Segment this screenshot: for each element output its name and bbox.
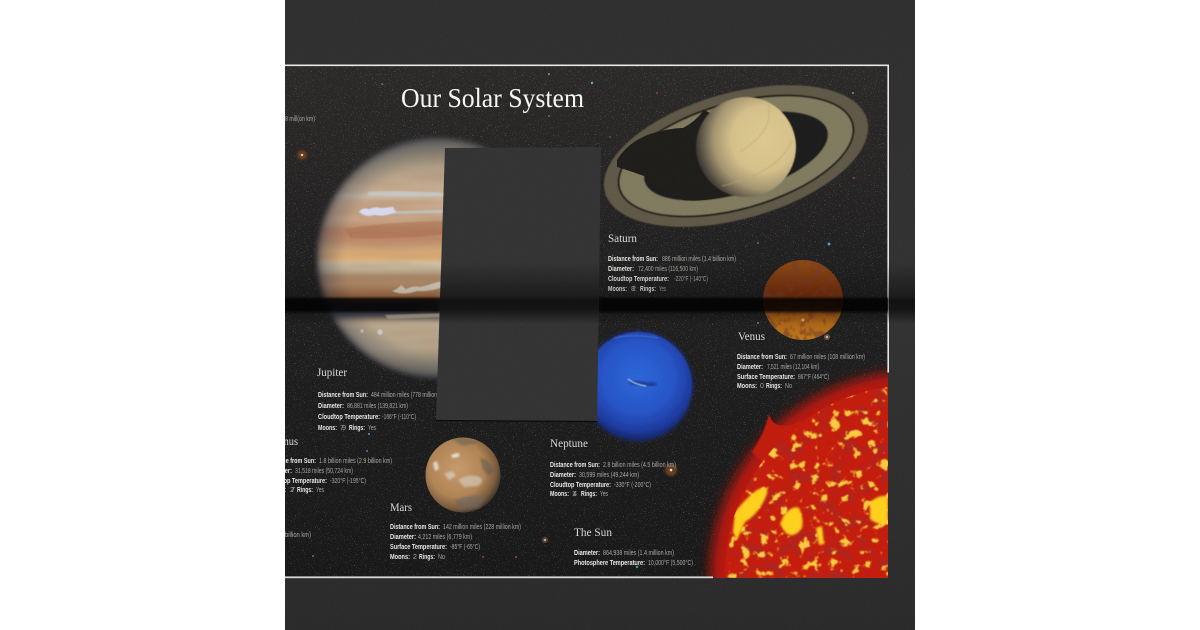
Sun prominence <box>752 414 801 460</box>
text block: Uranus: Rings: <box>297 487 313 494</box>
text block: Mars: 4,212 miles (6,779 km) <box>418 534 472 541</box>
text block: Venus: 7,521 miles (12,104 km) <box>767 364 819 371</box>
text block: Jupiter: Rings: <box>349 425 365 432</box>
text block: Neptune: Distance from Sun: <box>550 462 600 469</box>
Jupiter cloud details <box>345 191 445 335</box>
text block: Saturn: Diameter: <box>608 266 634 273</box>
text block: Venus: Moons: <box>737 383 757 390</box>
text block: Neptune: Moons: <box>550 491 569 498</box>
text block: Uranus <box>285 440 392 494</box>
text block: Venus <box>737 329 865 390</box>
horizontal fold shadow on margins <box>888 262 915 324</box>
Saturn globe <box>696 97 796 197</box>
text block: The Sun: Photosphere Temperature: <box>574 560 645 567</box>
text block: The Sun: Diameter: <box>574 550 600 557</box>
text block: Venus: Rings: <box>766 383 782 390</box>
text block: Neptune <box>550 436 676 498</box>
text block: Uranus: Moons: <box>266 487 286 494</box>
text block: Mars: Distance from Sun: <box>390 524 440 531</box>
text block: Venus: Diameter: <box>737 364 763 371</box>
text block: Mars: Rings: <box>419 554 435 561</box>
text block: Neptune: Neptune <box>550 436 588 450</box>
text block: Saturn: Rings: <box>640 286 656 293</box>
text block: Neptune: Cloudtop Temperature: <box>550 482 611 489</box>
text block: Mars: 142 million miles (228 million km) <box>443 524 521 531</box>
text block: Jupiter: 86,881 miles (139,821 km) <box>347 403 408 410</box>
text block: Venus: Surface Temperature: <box>737 374 795 381</box>
text block: Mars <box>390 500 521 561</box>
dark paper background <box>285 0 915 630</box>
text block: clipped distance fragments: 8 mill(on km) <box>285 116 315 123</box>
text block: Mars: -85°F (-65°C) <box>450 543 480 551</box>
planet: Venus <box>763 260 843 340</box>
text block: Uranus: Yes <box>316 487 324 494</box>
planet: Saturn <box>604 84 868 228</box>
text block: Saturn: 82 <box>631 286 636 293</box>
text block: Venus: Venus <box>738 329 765 343</box>
text block: Neptune: Rings: <box>581 491 597 498</box>
text block: Mars: Moons: <box>390 554 410 561</box>
text block: Saturn: 886 million miles (1.4 billion km) <box>662 256 736 263</box>
poster background <box>285 65 888 578</box>
text block: Uranus: 31,518 miles (50,724 km) <box>295 468 353 475</box>
star field <box>285 65 888 578</box>
text block: Jupiter <box>317 368 437 432</box>
text block: Uranus: Cloudtop Temperature: <box>266 478 327 485</box>
planet: Jupiter <box>314 136 488 380</box>
text block: Mars: No <box>438 554 445 561</box>
text block: Neptune: Yes <box>600 491 608 498</box>
text block: Saturn: -220°F (-140°C) <box>674 275 708 283</box>
title: Our Solar System <box>401 83 584 113</box>
text block: Mars: Diameter: <box>390 534 416 541</box>
text block: The Sun: The Sun <box>574 525 612 539</box>
text block: Venus: 0 <box>760 383 764 390</box>
text block: Neptune: 30,599 miles (49,244 km) <box>579 472 639 479</box>
text block: clipped distance fragments <box>285 116 315 539</box>
text block: Venus: 867°F (464°C) <box>798 373 829 381</box>
text block: The Sun: 864,938 miles (1.4 million km) <box>603 550 674 557</box>
text block: Uranus: Distance from Sun: <box>266 458 316 465</box>
text block: Jupiter: Diameter: <box>318 403 344 410</box>
text block: Jupiter: Cloudtop Temperature: <box>318 414 380 421</box>
text block: Saturn: Distance from Sun: <box>608 256 658 263</box>
text block: Saturn: Saturn <box>608 231 637 245</box>
text block: Venus: 67 million miles (108 million km) <box>790 354 865 361</box>
Saturn ring shadow <box>617 110 719 201</box>
text block: Jupiter: -166°F (-110°C) <box>382 413 416 421</box>
text block: clipped distance fragments: billion km) <box>285 532 311 539</box>
planet: Mars <box>426 438 500 512</box>
Sun surface <box>725 387 888 578</box>
horizontal fold shadow on poster <box>285 262 888 324</box>
Saturn rings <box>604 84 868 228</box>
text block: The Sun: 10,000°F (5,500°C) <box>648 559 693 567</box>
text block: Saturn: Moons: <box>608 286 627 293</box>
planet: Neptune <box>583 331 693 441</box>
text block: Jupiter: Jupiter <box>317 365 347 379</box>
The Sun <box>711 372 905 590</box>
text block: The Sun <box>574 525 693 567</box>
text block: Uranus: Diameter: <box>266 468 292 475</box>
text block: Jupiter: Moons: <box>318 425 337 432</box>
text block: Mars: Mars <box>390 500 412 514</box>
text block: Saturn: Yes <box>659 286 666 293</box>
text block: Neptune: 2.8 billion miles (4.5 billion km) <box>603 462 676 469</box>
text block: Neptune: Diameter: <box>550 472 576 479</box>
text block: Uranus: 1.8 billion miles (2.9 billion km) <box>319 458 392 465</box>
text block: Saturn: 72,400 miles (116,500 km) <box>638 266 698 273</box>
text block: Jupiter: 484 million miles (778 million km) <box>371 392 447 399</box>
text block: Uranus: 27 <box>290 487 295 494</box>
text block: Saturn <box>608 231 736 293</box>
text block: Mars: Surface Temperature: <box>390 544 447 551</box>
text block: Neptune: -330°F (-200°C) <box>614 481 651 489</box>
text block: Jupiter: Distance from Sun: <box>318 392 368 399</box>
poster <box>285 65 888 578</box>
text block: Jupiter: 79 <box>340 425 346 432</box>
text block: Venus: No <box>785 383 792 390</box>
coloured stars <box>297 73 855 568</box>
text block: Mars: 2 <box>413 554 417 561</box>
text block: Venus: Distance from Sun: <box>737 354 787 361</box>
text block: Neptune: 14 <box>572 491 577 498</box>
white frame <box>285 64 889 578</box>
paper grain <box>285 0 915 630</box>
text block: Jupiter: Yes <box>368 425 376 432</box>
folded paper flap <box>436 147 601 422</box>
text block: Uranus: Uranus <box>268 434 298 448</box>
text block: Uranus: -320°F (-195°C) <box>330 477 366 485</box>
text block: Saturn: Cloudtop Temperature: <box>608 276 669 283</box>
Sun corona <box>711 372 905 590</box>
